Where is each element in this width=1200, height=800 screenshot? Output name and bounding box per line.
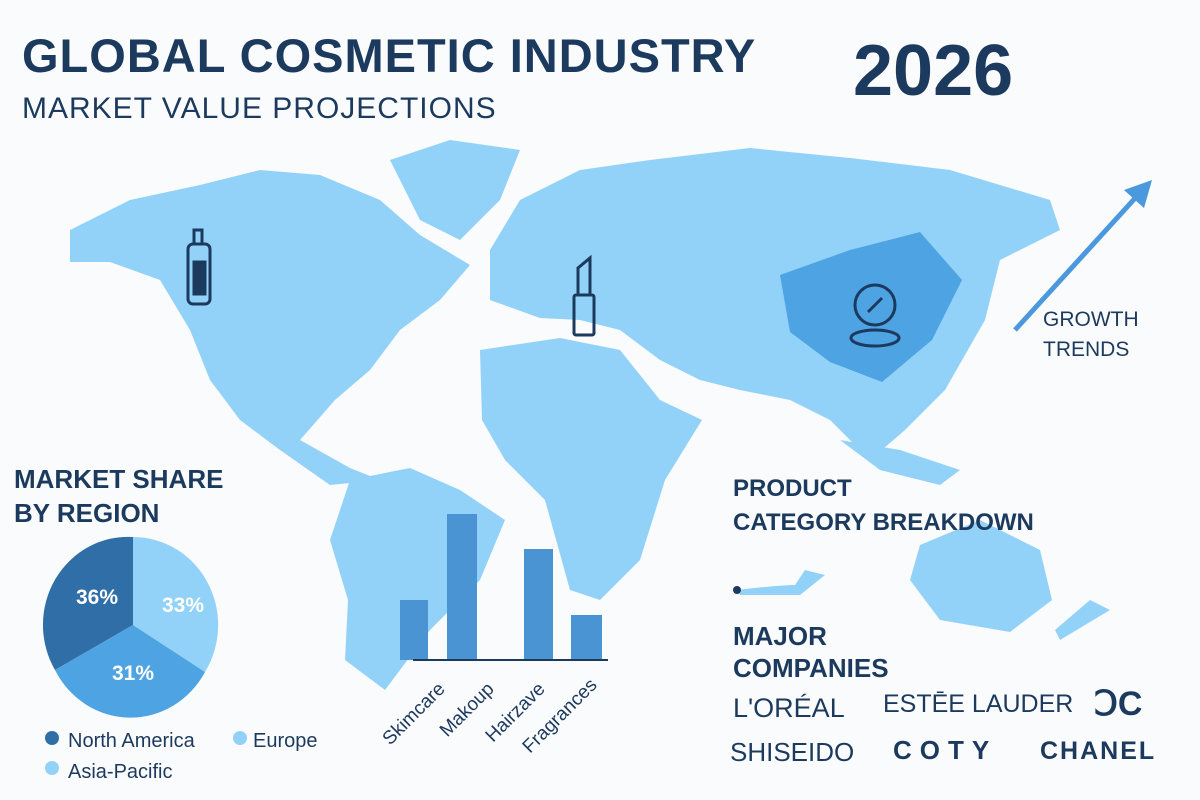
- continent: eurasia: [490, 148, 1060, 460]
- island: south squiggle: [737, 570, 825, 595]
- growth trends label: GROWTH: [1043, 308, 1139, 331]
- continent: africa: [480, 338, 702, 600]
- icon: bottle: [188, 230, 210, 304]
- title: GLOBAL COSMETIC INDUSTRY: [22, 29, 756, 82]
- bar chart: Fragrances: [519, 675, 602, 757]
- company logos: ↃC: [1094, 685, 1142, 723]
- continent: greenland: [390, 140, 520, 240]
- heading: product category: PRODUCT: [733, 475, 852, 502]
- legend: Asia-Pacific: [68, 761, 172, 783]
- pie chart: 36%: [76, 586, 118, 609]
- company logos: L'ORÉAL: [733, 693, 845, 723]
- arrow: growth: [1015, 180, 1152, 330]
- icon: lipstick: [574, 258, 594, 335]
- subtitle: MARKET VALUE PROJECTIONS: [22, 92, 497, 125]
- bar chart: Hairzave: [482, 679, 550, 747]
- growth trends label: TRENDS: [1043, 338, 1129, 361]
- pie chart: 31%: [112, 662, 154, 685]
- growth trends label: [1043, 308, 1139, 361]
- company logos: [730, 685, 1156, 767]
- heading: product category: [733, 475, 1034, 536]
- company logos: CHANEL: [1040, 737, 1156, 765]
- heading: product category: CATEGORY BREAKDOWN: [733, 509, 1034, 536]
- heading: major companies: [733, 621, 889, 683]
- continent: north america: [70, 170, 470, 485]
- legend: [68, 730, 318, 783]
- year: 2026: [853, 31, 1013, 111]
- pie chart: 33%: [162, 594, 204, 617]
- legend dots: [45, 731, 59, 745]
- text: Europe: [253, 730, 318, 752]
- legend: North America: [68, 730, 195, 752]
- icon: compact: [851, 285, 899, 346]
- region: china: [780, 232, 962, 382]
- heading: major companies: COMPANIES: [733, 653, 889, 683]
- heading: market share: BY REGION: [14, 498, 159, 528]
- company logos: SHISEIDO: [730, 737, 854, 767]
- heading: market share: [14, 464, 223, 528]
- heading: major companies: MAJOR: [733, 621, 827, 651]
- company logos: COTY: [893, 735, 997, 765]
- company logos: ESTĒE LAUDER: [883, 690, 1073, 718]
- continent: south america: [330, 468, 505, 690]
- continent: australia: [910, 520, 1052, 632]
- pie chart: [43, 537, 218, 718]
- bar chart: [379, 514, 608, 757]
- bar chart: Skimcare: [379, 679, 450, 750]
- bar chart: Makoup: [436, 679, 499, 741]
- heading: market share: MARKET SHARE: [14, 464, 223, 494]
